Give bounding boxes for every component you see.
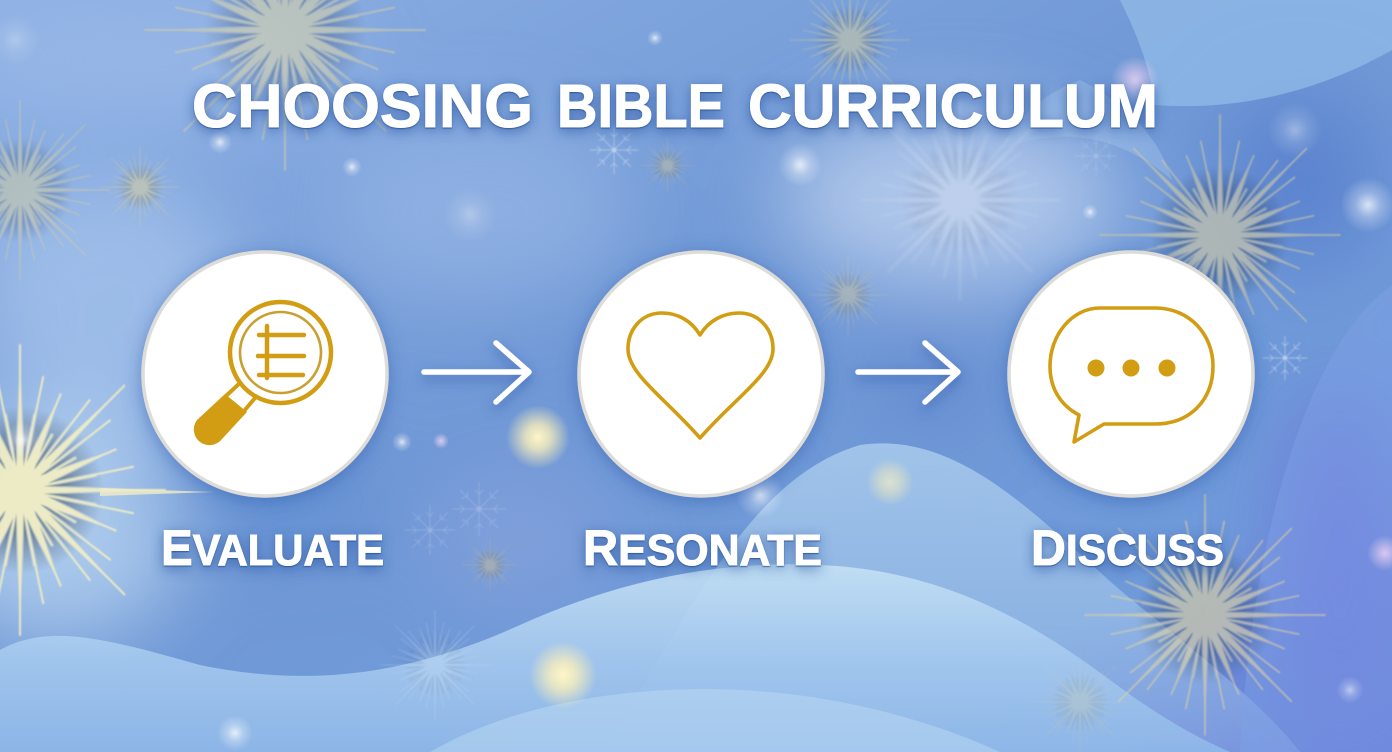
right wave: [1240, 285, 1392, 752]
title: BIBLE: [557, 72, 725, 140]
mid hump wave: [600, 443, 1300, 752]
title: CHOOSING: [192, 72, 533, 140]
step 2: resonate circle with heart icon: [579, 252, 823, 496]
arrow 1: [424, 343, 529, 402]
icon: heart: [628, 313, 773, 438]
label: resonate: RESONATE: [583, 520, 822, 576]
bottom wave: [0, 564, 1230, 752]
step 1: evaluate circle with magnifying glass icon: [143, 252, 387, 496]
label: evaluate: EVALUATE: [161, 520, 384, 576]
title: CURRICULUM: [748, 72, 1158, 140]
upper-right swoosh: [1120, 0, 1392, 106]
step 3: discuss circle with speech bubble icon: [1009, 252, 1253, 496]
icon: speech bubble: [1050, 308, 1213, 442]
label: discuss: DISCUSS: [1031, 520, 1224, 576]
icon: magnifying glass: [194, 302, 331, 445]
arrow 2: [858, 343, 958, 402]
